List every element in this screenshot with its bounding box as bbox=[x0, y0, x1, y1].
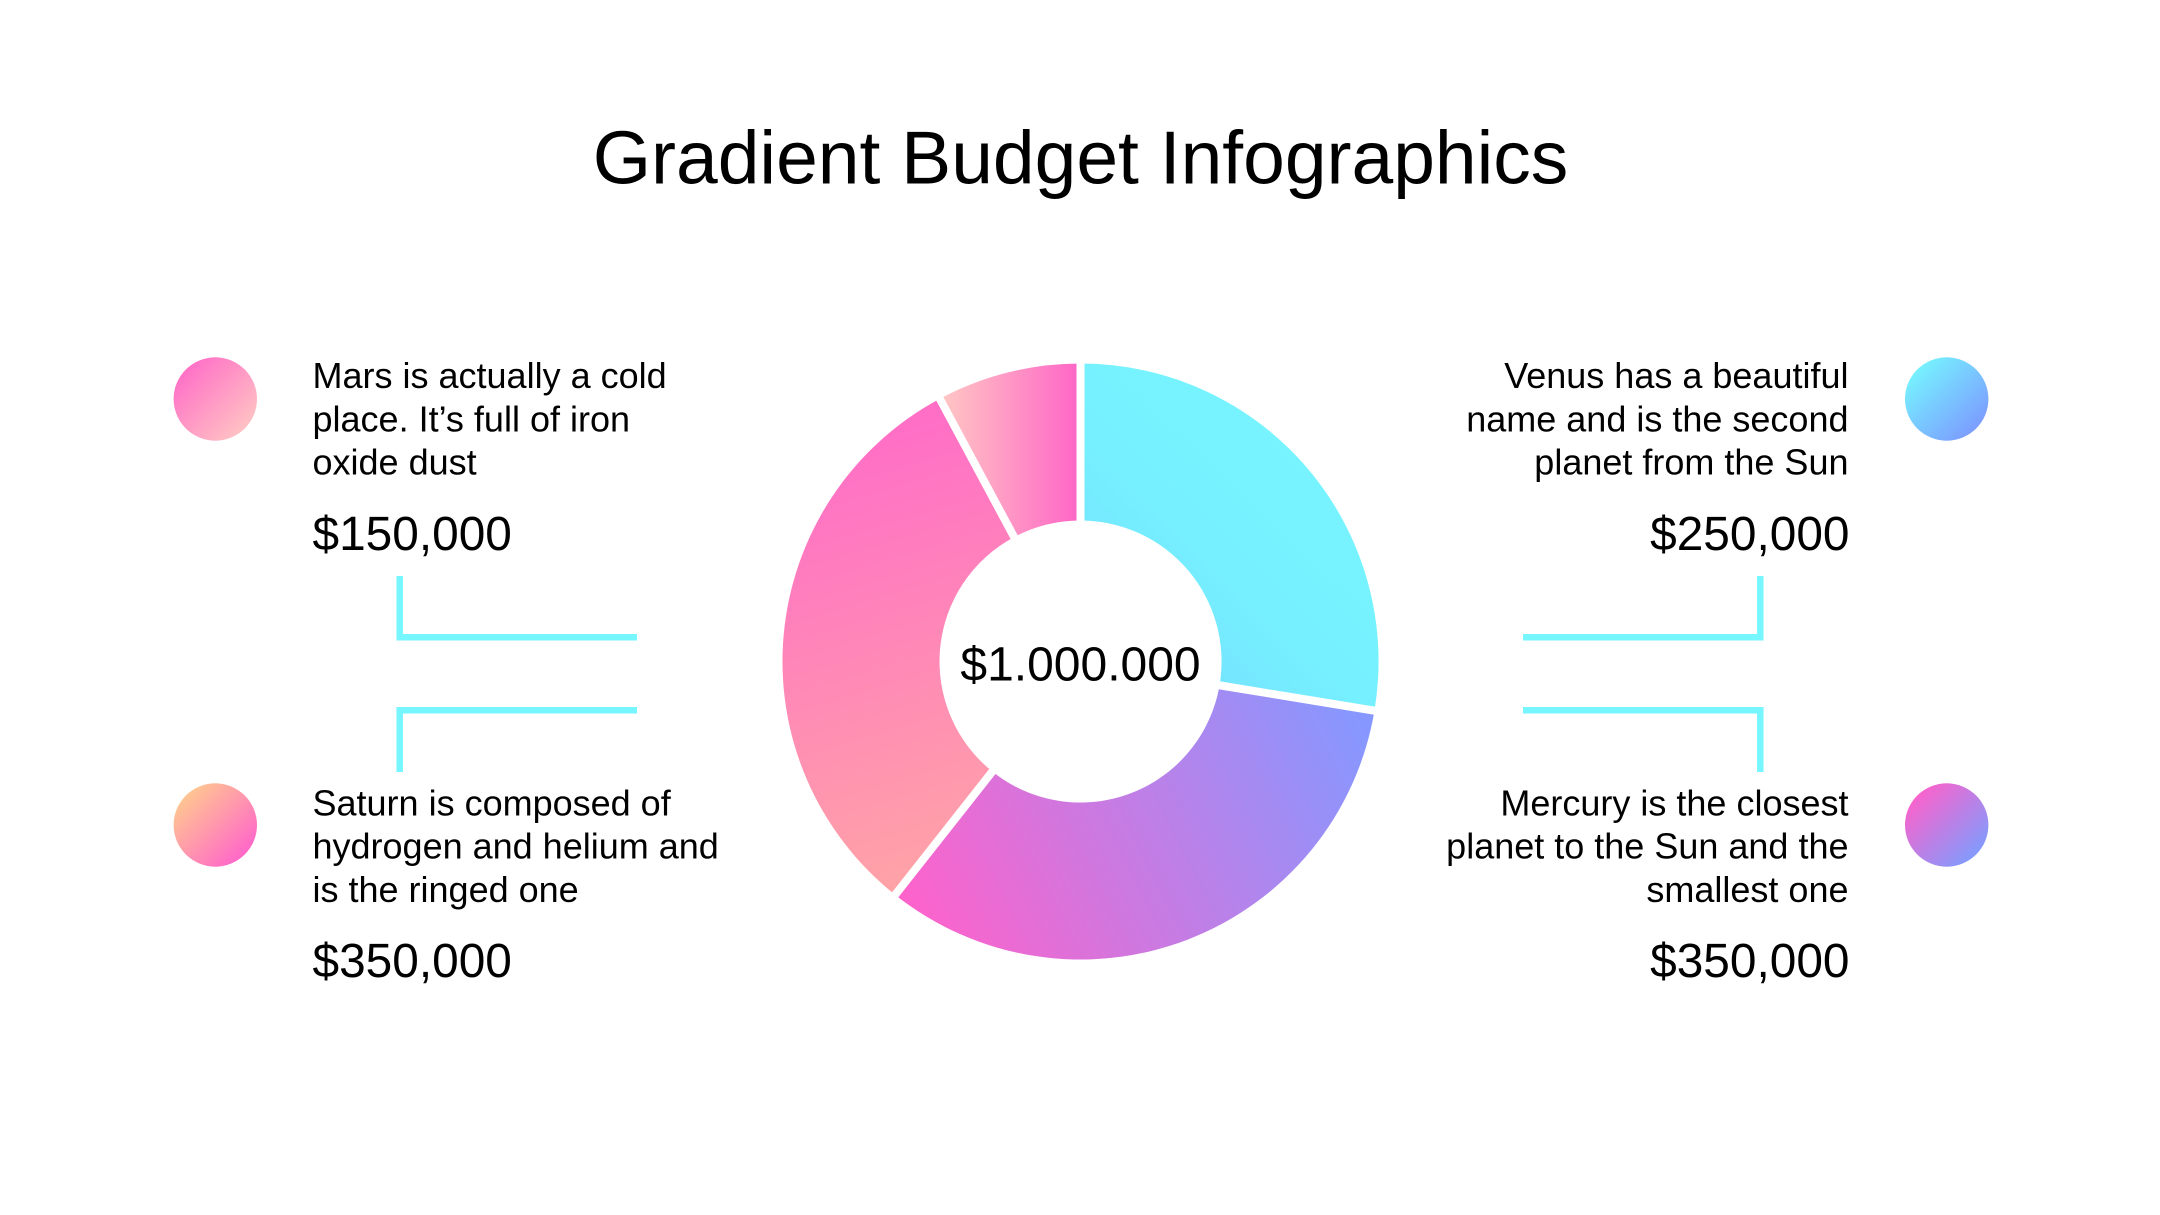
connector: Venus bbox=[1523, 576, 1760, 637]
Mars description: oxide dust bbox=[312, 442, 477, 483]
connector: Mars bbox=[400, 576, 637, 637]
Saturn description: Saturn is composed of bbox=[312, 782, 672, 823]
icon: Venus circle bbox=[1905, 357, 1988, 441]
Mars description: place. It’s full of iron bbox=[312, 398, 630, 439]
segment: Mercury bbox=[895, 686, 1374, 960]
total amount: $1.000.000 bbox=[960, 638, 1201, 692]
connector: Mercury bbox=[1523, 710, 1760, 772]
Mars description: Mars is actually a cold bbox=[312, 355, 667, 396]
panel: Saturn bbox=[174, 782, 719, 988]
panel: Mercury bbox=[1446, 782, 1988, 988]
segment: Venus bbox=[1080, 363, 1379, 710]
segment: Saturn bbox=[782, 399, 1014, 895]
Saturn description: hydrogen and helium and bbox=[312, 826, 719, 867]
icon: Mercury circle bbox=[1905, 783, 1988, 867]
connector: Saturn bbox=[400, 710, 637, 772]
panel: Venus bbox=[1466, 355, 1988, 561]
Venus description: planet from the Sun bbox=[1534, 442, 1848, 483]
segment: Mars bbox=[940, 364, 1080, 537]
icon: Mars circle bbox=[174, 357, 257, 441]
Mercury description: Mercury is the closest bbox=[1500, 782, 1848, 823]
Venus description: Venus has a beautiful bbox=[1504, 355, 1848, 396]
Mercury description: planet to the Sun and the bbox=[1446, 826, 1848, 867]
Venus amount: $250,000 bbox=[1650, 508, 1850, 561]
panel: Mars bbox=[174, 355, 667, 561]
Mars amount: $150,000 bbox=[312, 508, 512, 561]
Saturn description: is the ringed one bbox=[312, 869, 579, 910]
icon: Saturn circle bbox=[174, 783, 257, 867]
title: Gradient Budget Infographics bbox=[593, 116, 1568, 200]
donut chart bbox=[782, 358, 1380, 960]
Mercury description: smallest one bbox=[1646, 869, 1848, 910]
Saturn amount: $350,000 bbox=[312, 935, 512, 988]
Mercury amount: $350,000 bbox=[1650, 935, 1850, 988]
Venus description: name and is the second bbox=[1466, 398, 1848, 439]
